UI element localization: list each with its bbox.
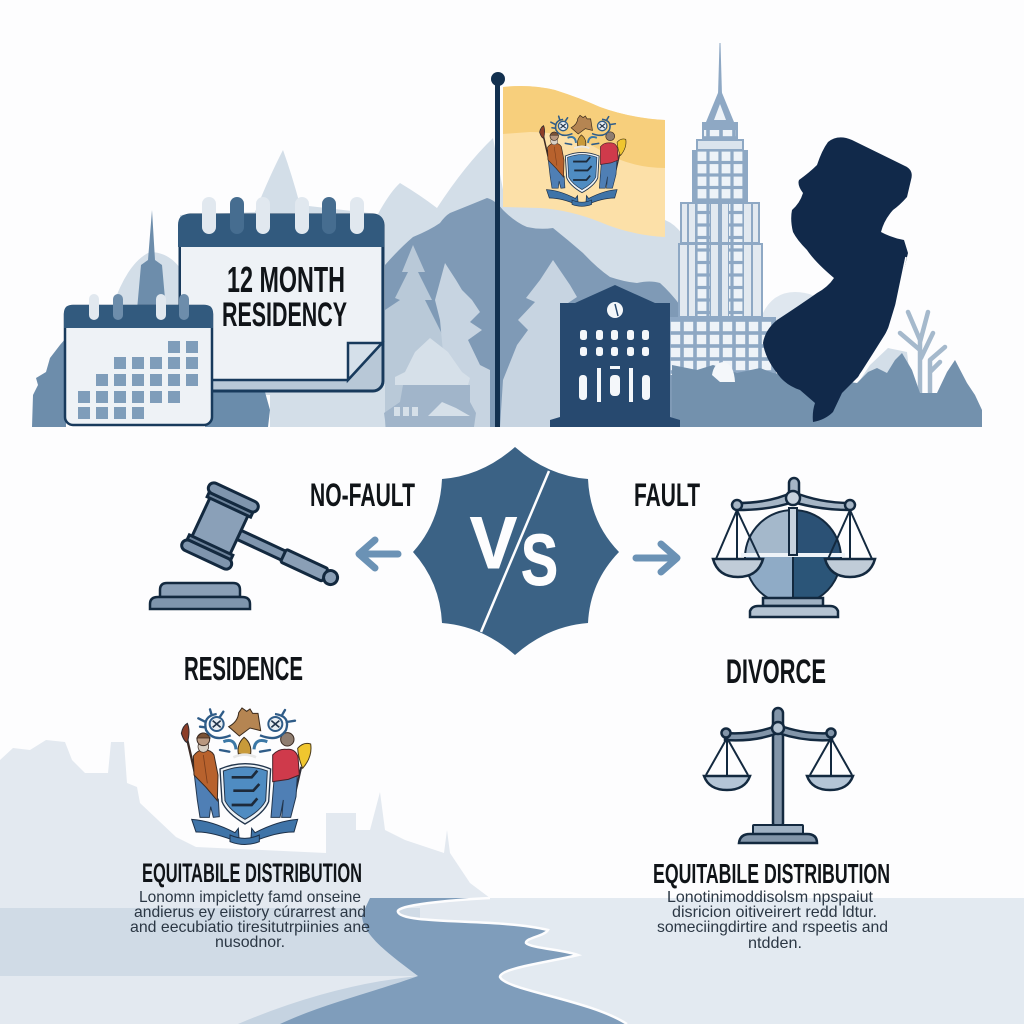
scene: New Jersey landscape [32, 43, 982, 427]
label: residence: RESIDENCE [184, 650, 303, 687]
pale hills behind tower [760, 292, 825, 340]
pine right of the pole [500, 260, 577, 427]
right body text: someciingdirtire and rspeetis and [657, 919, 888, 936]
right subheading: EQUITABILE DISTRIBUTION [653, 858, 890, 889]
left body text: and eecubiatio tiresitutrpiinies ane [130, 919, 370, 936]
arrow: left [359, 540, 398, 568]
pale hill behind map [850, 348, 912, 395]
skyscraper [668, 43, 776, 375]
calendar text: 12 MONTH [227, 259, 345, 300]
New Jersey map silhouette [763, 137, 912, 422]
river right bank [398, 898, 627, 1024]
arrow: right [636, 544, 677, 572]
left text block [130, 858, 370, 951]
left body text [130, 889, 370, 951]
icon: balance scale [704, 708, 853, 843]
faded skyline [0, 740, 490, 1024]
label: no-fault: NO-FAULT [310, 477, 415, 513]
left body text: nusodnor. [215, 934, 285, 951]
small calendar [64, 294, 213, 425]
bottom landscape [0, 740, 1024, 1024]
spire silhouette [137, 210, 166, 310]
icon: gavel [150, 481, 353, 614]
icon: state seal [181, 708, 311, 844]
right body text: disricion oitiveirert redd ldtur. [672, 904, 877, 921]
right text block [653, 858, 890, 952]
mid blue mountain [385, 198, 680, 427]
left water band [0, 908, 420, 976]
left tree silhouette [32, 338, 66, 427]
label: divorce: DIVORCE [726, 653, 826, 691]
barrier island coastline [860, 257, 906, 375]
VS badge: S [521, 521, 558, 601]
foreground tree line [672, 353, 982, 427]
VS badge [413, 447, 619, 655]
flag [503, 86, 665, 237]
right water band [480, 898, 1024, 1024]
large calendar [178, 197, 384, 391]
fir tree [385, 245, 470, 427]
courthouse [550, 285, 680, 427]
left body text: Lonomn impicletty famd onseine [139, 889, 361, 906]
flag seal [540, 115, 626, 206]
light pine tree [435, 263, 490, 427]
large calendar: RESIDENCY [222, 296, 347, 334]
pagoda [384, 338, 476, 427]
distant light mountains [113, 138, 682, 427]
white rock in tree line [712, 362, 735, 382]
flagpole [491, 72, 505, 427]
river [280, 898, 627, 1024]
left body text: andierus ey eiistory cúrarrest and [134, 904, 366, 921]
dark foothill under calendar [205, 392, 270, 427]
river halo [238, 976, 418, 1024]
label: fault: FAULT [634, 477, 700, 513]
VS badge: V [470, 503, 517, 584]
right body text [657, 889, 888, 952]
left subheading: EQUITABILE DISTRIBUTION [142, 858, 362, 888]
right body text: Lonotinimoddisolsm npspaiut [667, 889, 874, 906]
bare tree [900, 312, 945, 393]
icon: scales with globe [713, 478, 875, 617]
right body text: ntdden. [748, 935, 802, 952]
